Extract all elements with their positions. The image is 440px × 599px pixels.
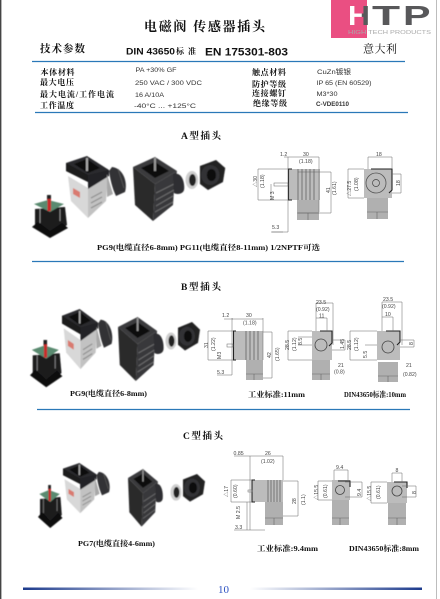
dimension drawing: type B front industry bbox=[285, 300, 346, 380]
title: 电磁阀 传感器插头 bbox=[144, 19, 266, 34]
dimension drawing: type C side: 3.3 bbox=[235, 525, 242, 531]
dimension drawing: type B front DIN: 8 bbox=[409, 342, 415, 345]
logo: HTP: P bbox=[403, 1, 431, 31]
dimension drawing: type B side: (1.22) bbox=[211, 337, 217, 351]
dimension drawing: type C front industry: △15.5 bbox=[312, 485, 320, 500]
dimension drawing: type B front industry: 8.5 bbox=[298, 338, 304, 345]
logo: HTP: H bbox=[348, 1, 370, 32]
dimension drawing: type B front DIN: (1.12) bbox=[354, 337, 360, 351]
dimension drawing: type B front industry: (0.92) bbox=[316, 307, 330, 313]
dimension drawing: type C side: (1.02) bbox=[261, 459, 275, 465]
dimension drawing: type B side: 30 bbox=[246, 313, 252, 319]
dimension drawing: type C side: M 2.5 bbox=[236, 506, 242, 519]
dimension drawing: type C front DIN: 8 bbox=[412, 491, 418, 494]
dimension drawing: type A side: (1.61) bbox=[332, 181, 338, 195]
dimension drawing: type B front industry: 23.5 bbox=[316, 300, 326, 306]
dimension drawing: type C front DIN: (0.61) bbox=[376, 485, 382, 499]
dimension drawing: type C front DIN: 8 bbox=[396, 468, 398, 474]
dimension drawing: type A front: △27.5 bbox=[345, 181, 353, 196]
dimension drawing: type A side bbox=[251, 152, 338, 232]
dimension drawing: type C side: 26 bbox=[265, 451, 271, 457]
product photo: type B connectors bbox=[30, 309, 200, 387]
logo: HTP bbox=[331, 0, 432, 38]
dimension drawing: type C front industry bbox=[312, 465, 363, 525]
dimension drawing: type C front DIN: △15.5 bbox=[365, 486, 373, 501]
dimension drawing: type B front DIN: 21 bbox=[406, 363, 412, 369]
dimension drawing: type C side bbox=[222, 451, 307, 531]
spec table right: C-VDE0110 bbox=[316, 101, 349, 108]
dimension drawing: type B side: 31 bbox=[204, 342, 210, 348]
dimension drawing: type B front industry: (1.12) bbox=[292, 337, 298, 351]
spec table left: -40°C ... +125°C bbox=[134, 102, 196, 110]
spec table left: 本体材料 bbox=[40, 67, 74, 77]
dimension drawing: type B front DIN: (0.82) bbox=[403, 372, 417, 378]
standard: DIN 43650: 标准 bbox=[176, 46, 196, 56]
dimension drawing: type A front: 18 bbox=[376, 152, 382, 158]
spec table right: 防护等级 bbox=[252, 79, 286, 89]
page edge left bbox=[0, 0, 1, 599]
spec table left: 250 VAC / 300 VDC bbox=[135, 80, 202, 87]
standard: EN 175301-803: EN 175301-803 bbox=[205, 46, 288, 58]
spec table right: CuZn镀银 bbox=[317, 67, 351, 76]
dimension drawing: type C front industry: (0.61) bbox=[323, 484, 329, 498]
caption: type C industry standard: 工业标准:9.4mm bbox=[257, 543, 319, 553]
spec table right: 连接螺钉 bbox=[252, 88, 286, 98]
caption: type C: PG7(电缆直接4-6mm) bbox=[78, 538, 156, 548]
caption: type C DIN standard: DIN43650标准:8mm bbox=[349, 543, 420, 553]
origin: Italy: 意大利 bbox=[363, 42, 397, 56]
spec table right: M3*30 bbox=[316, 91, 338, 98]
dimension drawing: type B front industry: 21 bbox=[338, 363, 344, 369]
caption: type B DIN standard: DIN43650标准:10mm bbox=[344, 389, 407, 399]
dimension drawing: type B front industry: (0.8) bbox=[334, 370, 345, 376]
caption: type B industry standard: 工业标准:11mm bbox=[248, 389, 306, 399]
dimension drawing: type A front bbox=[345, 152, 402, 219]
dimension drawing: type B front DIN: 5.5 bbox=[363, 351, 369, 358]
spec table right bbox=[252, 67, 372, 108]
product photo: type C connectors bbox=[38, 463, 205, 528]
spec table left: 最大电压 bbox=[40, 77, 74, 87]
dimension drawing: type C side: △17 bbox=[222, 486, 230, 497]
spec table right: 绝缘等级 bbox=[253, 98, 287, 108]
dimension drawing: type A side: (1.18) bbox=[260, 174, 266, 188]
spec table left: 16 A/10A bbox=[135, 92, 164, 99]
heading: type A: A型插头 bbox=[181, 130, 222, 142]
dimension drawing: type B front DIN: 28.5 bbox=[347, 340, 353, 350]
spec table left bbox=[40, 67, 202, 110]
dimension drawing: type A side: 5.3 bbox=[272, 225, 279, 231]
dimension drawing: type B front DIN: 23.5 bbox=[383, 297, 393, 303]
dimension drawing: type C front industry: 9.4 bbox=[336, 465, 343, 471]
dimension drawing: type A side: 41 bbox=[326, 187, 332, 193]
dimension drawing: type B front industry: 28.5 bbox=[285, 340, 291, 350]
spec table left: PA +30% GF bbox=[136, 67, 176, 74]
logo: HTP: T bbox=[372, 1, 400, 32]
standard: DIN 43650: DIN 43650 bbox=[126, 46, 175, 58]
dimension drawing: type A front: (1.08) bbox=[354, 177, 360, 191]
dimension drawing: type C side: 0.85 bbox=[234, 451, 244, 457]
spec table right: IP 65 (EN 60529) bbox=[316, 80, 372, 87]
dimension drawing: type A front: 18 bbox=[396, 180, 402, 186]
dimension drawing: type B side: M3 bbox=[217, 352, 223, 359]
heading: type C: C型插头 bbox=[183, 430, 224, 442]
dimension drawing: type B front industry: 11 bbox=[319, 314, 324, 320]
dimension drawing: type A side: △30 bbox=[251, 176, 259, 187]
logo: HTP: HIGH TECH PRODUCTS bbox=[348, 30, 432, 36]
dimension drawing: type B front DIN bbox=[347, 297, 417, 382]
standard: DIN 43650 bbox=[126, 46, 196, 58]
dimension drawing: type B side: 1.2 bbox=[222, 313, 229, 319]
spec table left: 工作温度 bbox=[40, 100, 74, 110]
page number: 10 bbox=[218, 584, 230, 596]
caption: type B: PG9(电缆直径6-8mm) bbox=[70, 388, 148, 398]
dimension drawing: type B front DIN: 10 bbox=[385, 312, 391, 318]
dimension drawing: type A side: 30 bbox=[303, 152, 309, 158]
dimension drawing: type A side: 1.2 bbox=[280, 152, 287, 158]
footer bar left bbox=[23, 588, 198, 590]
spec table right: 触点材料 bbox=[252, 67, 286, 77]
dimension drawing: type A side: M 3 bbox=[270, 191, 276, 200]
spec table left: 最大电流/工作电流 bbox=[40, 89, 115, 99]
dimension drawing: type B front industry: 1.45 bbox=[340, 339, 346, 349]
dimension drawing: type B side bbox=[204, 313, 281, 380]
heading: type B: B型插头 bbox=[181, 281, 222, 293]
dimension drawing: type C side: (1.1) bbox=[301, 494, 307, 505]
dimension drawing: type C side: (0.60) bbox=[233, 484, 239, 498]
caption: type A: PG9(电缆直径6-8mm) PG11(电缆直径8-11mm) 1/2NPTF可选 bbox=[97, 242, 321, 252]
dimension drawing: type C side: 28 bbox=[292, 498, 298, 504]
footer bar right bbox=[250, 588, 422, 590]
dimension drawing: type C front industry: 9.4 bbox=[357, 489, 363, 496]
heading: technical parameters: 技术参数 bbox=[40, 42, 86, 55]
dimension drawing: type B side: (1.18) bbox=[243, 320, 257, 326]
dimension drawing: type B side: 42 bbox=[267, 352, 273, 358]
dimension drawing: type B side: 5.3 bbox=[217, 370, 224, 376]
product photo: type A connectors bbox=[32, 156, 225, 238]
dimension drawing: type A side: (1.18) bbox=[299, 159, 313, 165]
dimension drawing: type C front DIN bbox=[365, 468, 418, 525]
dimension drawing: type B front DIN: (0.92) bbox=[382, 304, 396, 310]
page edge right bbox=[436, 0, 437, 599]
dimension drawing: type B side: (1.65) bbox=[275, 347, 281, 361]
